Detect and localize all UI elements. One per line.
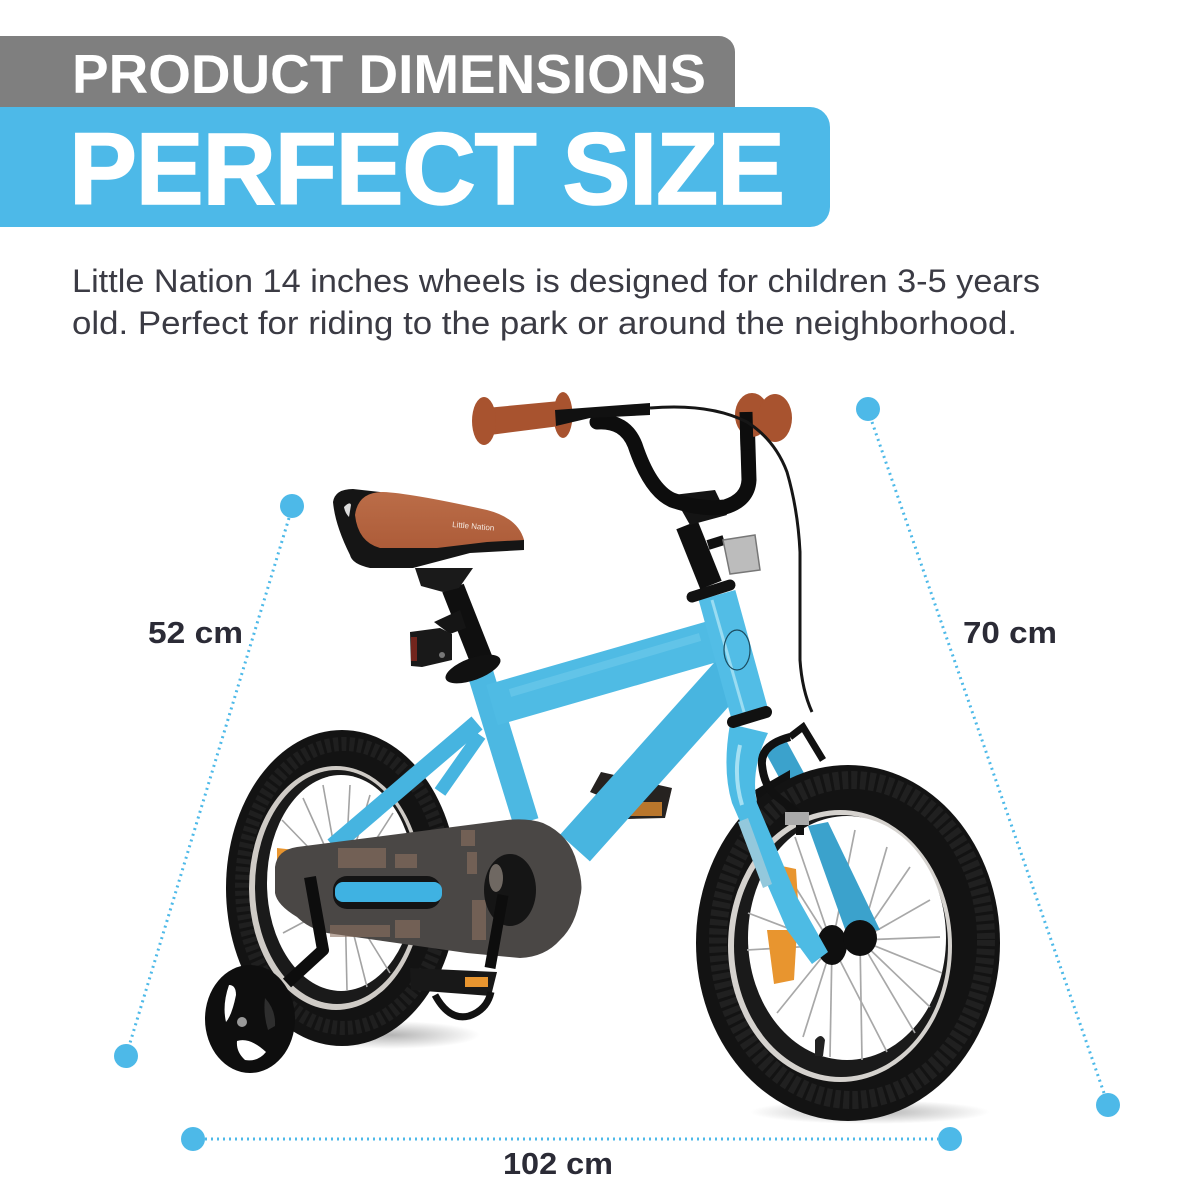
saddle: Little Nation [452,520,495,533]
training wheel [205,965,295,1073]
chain guard [275,819,581,958]
crank arm [490,895,503,968]
brake lever [555,403,650,426]
frame: top tube [492,637,718,705]
front fork far leg, lower part [808,822,880,932]
front wheel [696,765,1000,1121]
rear pedal and crank [410,968,497,1017]
header banner: perfect size: PERFECT SIZE [69,112,785,226]
left grip [472,392,572,445]
handlebar [597,415,749,508]
description text: Little Nation 14 inches wheels is designed for children 3-5 years [72,263,1040,299]
description text: old. Perfect for riding to the park or around the neighborhood. [72,305,1017,341]
dimension: bike length 102 cm: 102 cm [503,1146,613,1181]
stem and reflector [673,490,760,585]
rear wheel [226,730,458,1046]
dimension: bike height 70 cm: 70 cm [963,615,1057,650]
brake cable [650,407,812,712]
dimension: seat height 52 cm [114,494,304,1068]
front brake [762,727,823,835]
far pedal [590,772,672,819]
frame: head tube [712,595,750,715]
dimension: bike length 102 cm [181,1127,962,1181]
ground shadow [300,1021,990,1124]
front hub [817,920,877,965]
dimension: seat height 52 cm: 52 cm [148,615,243,650]
handlebar right upright over grip [746,412,747,450]
training wheel bracket [287,877,323,983]
dimension: bike height 70 cm [856,397,1120,1117]
header banner: product dimensions: PRODUCT DIMENSIONS [72,43,706,105]
frame: front fork [726,724,828,964]
frame: down tube [575,675,730,848]
right grip [735,393,792,442]
head tube collars [692,585,766,722]
saddle [333,489,524,568]
description text [72,263,1040,341]
bicycle illustration [205,392,1000,1124]
frame: rear stays [333,723,480,846]
front fork far leg, upper part [775,745,805,800]
frame: seat tube [480,672,526,822]
seat post and clamp [410,568,504,689]
